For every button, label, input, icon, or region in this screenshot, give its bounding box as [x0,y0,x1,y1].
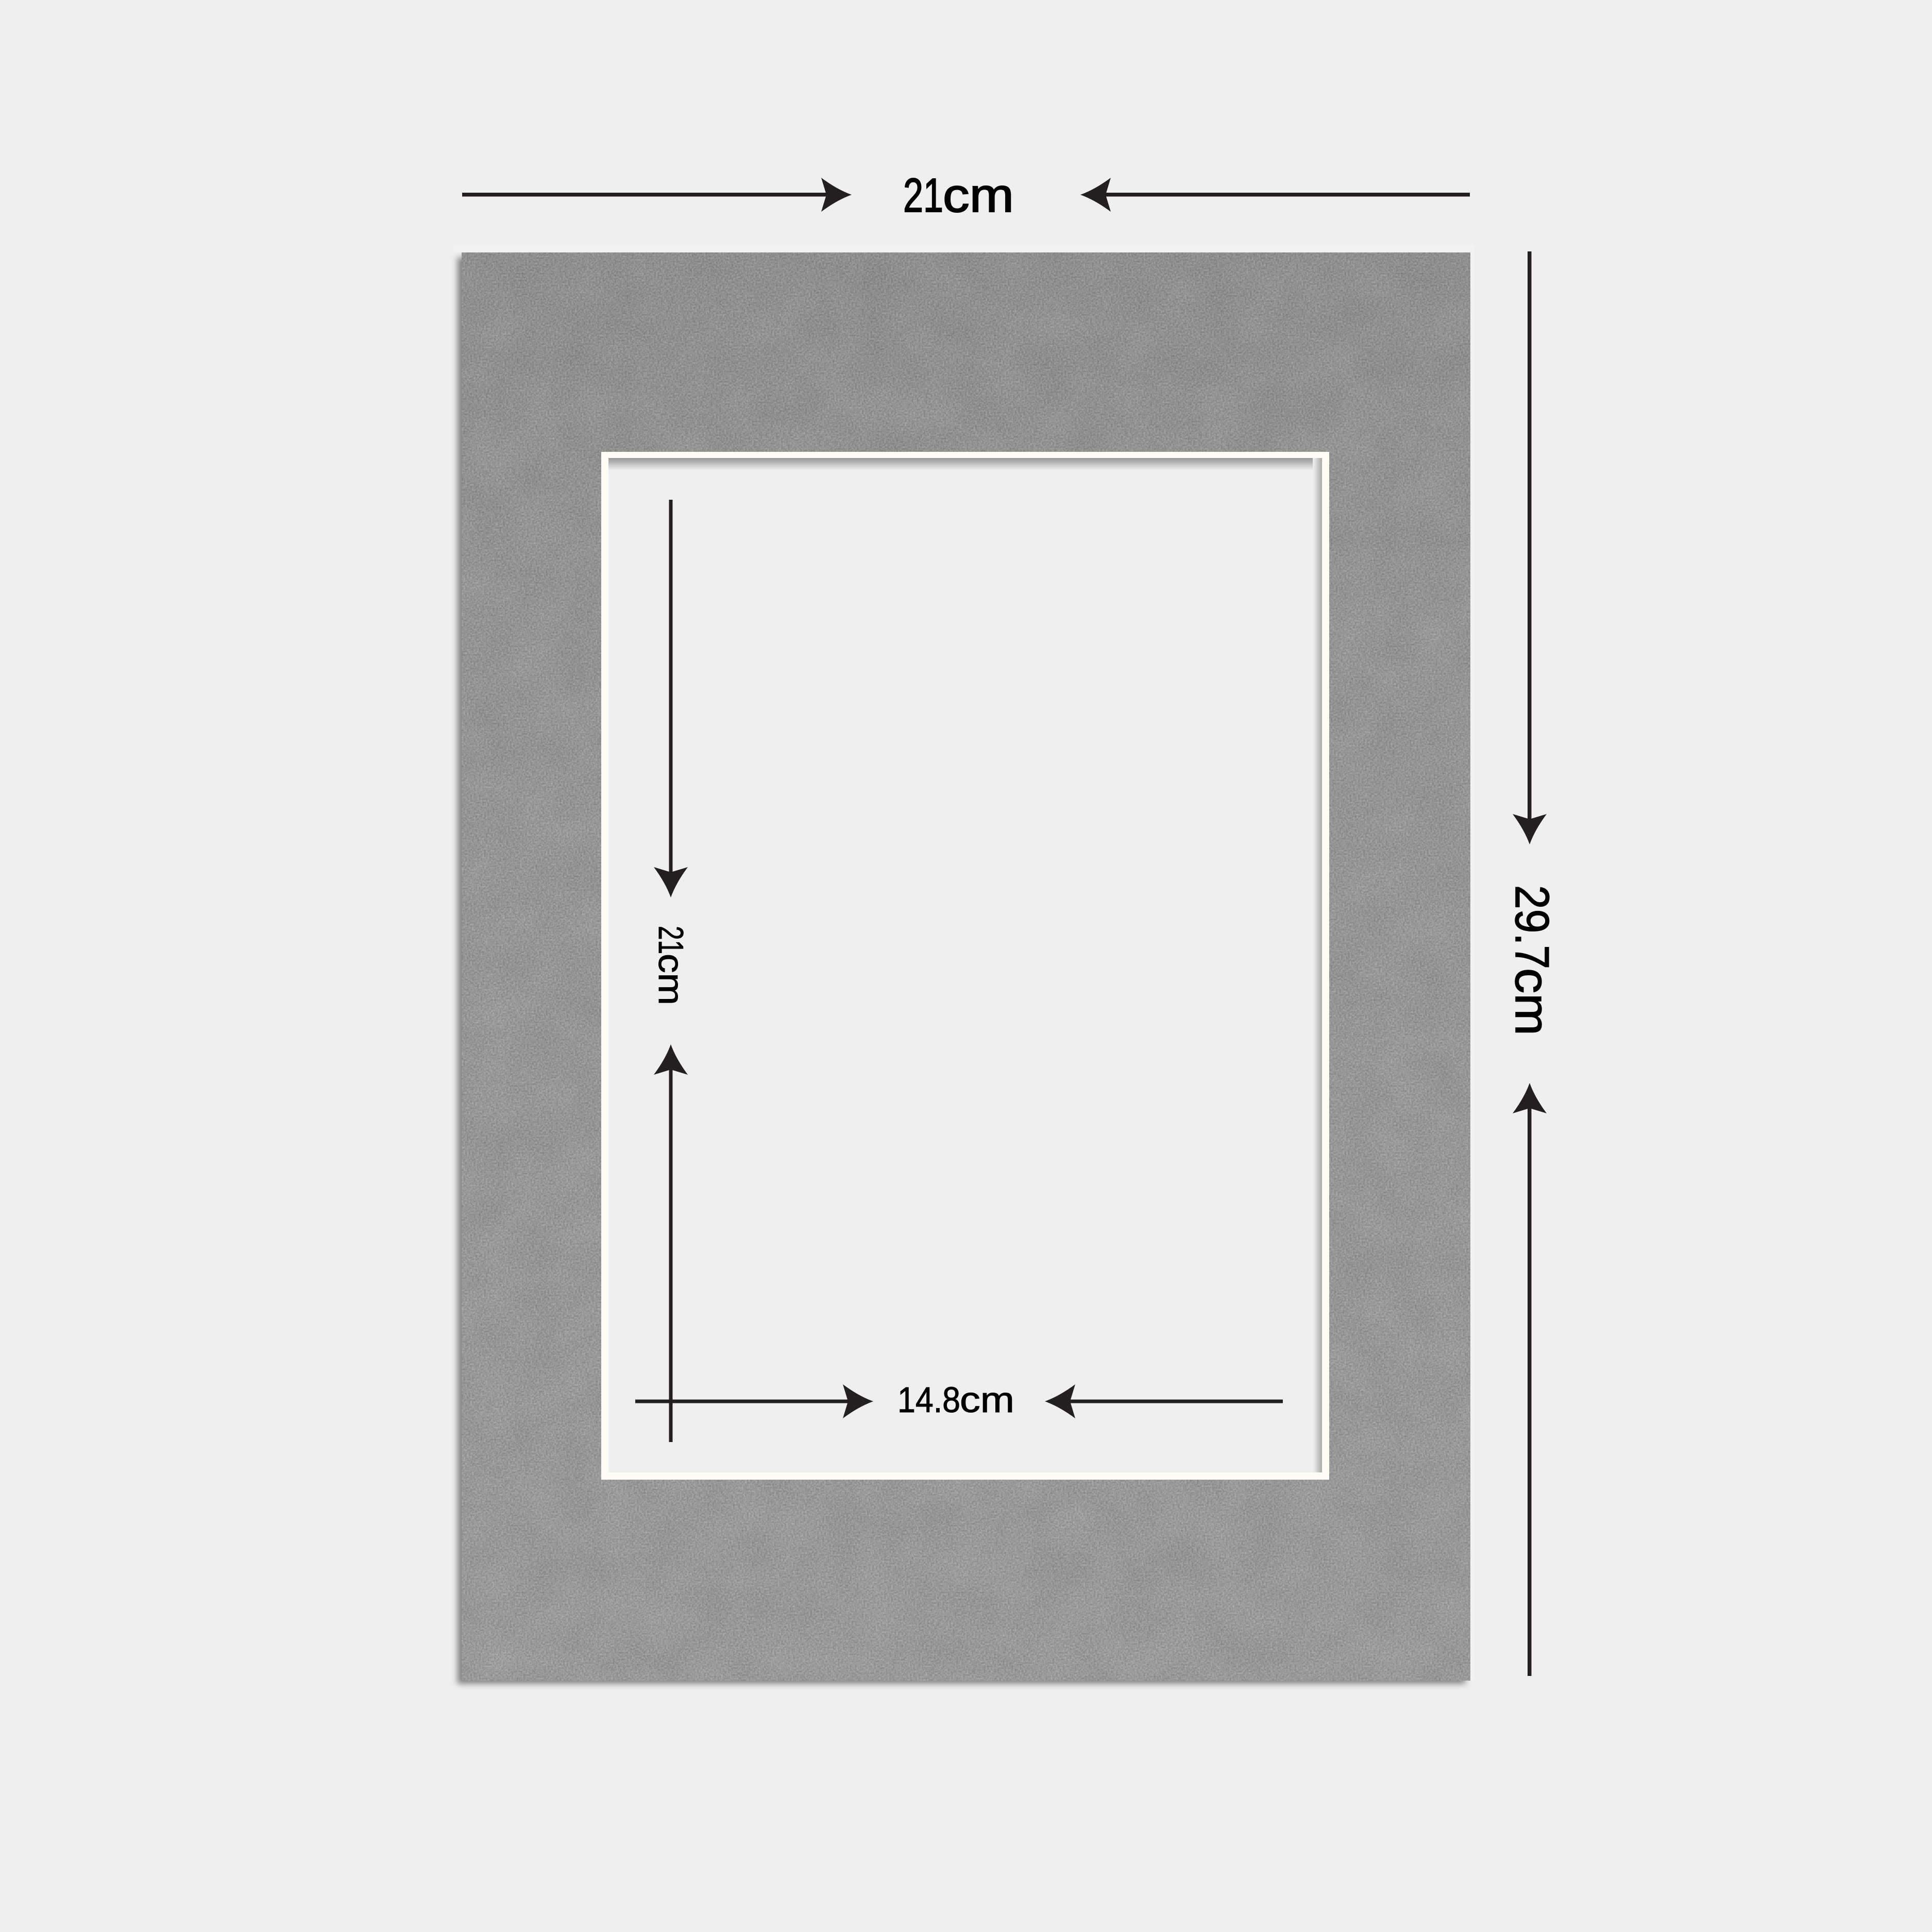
arrow: inner bottom pointing left [1045,1384,1283,1418]
mount light halo [453,244,1475,1681]
inner width dimension: 14.8cm [635,1380,1283,1420]
arrow: top left pointing right [462,178,852,212]
label: 14.8cm inner width: 14.8 [897,1380,960,1420]
label: 21cm outer width: 21 [903,168,943,222]
label: 21cm inner height: cm [651,954,690,1005]
inner height dimension: 21cm [651,500,690,1442]
arrow: right side pointing up [1513,1083,1547,1676]
window interior [608,458,1322,1472]
arrow: inner pointing up [654,1044,688,1442]
panel: grey picture mount [453,244,1475,1684]
panel: cream window opening [601,452,1329,1480]
arrow: inner pointing down [654,500,688,897]
cream bevel [601,452,1329,1480]
label: 14.8cm inner width: cm [960,1380,1014,1420]
label: 21cm inner height: 21 [651,926,690,954]
label: 29.7cm outer height: cm [1505,968,1559,1036]
inner right shadow [1313,458,1322,1472]
mount board [462,252,1470,1681]
arrow: inner bottom pointing right [635,1384,873,1418]
label: 29.7cm outer height: 29.7 [1505,885,1559,969]
right dimension: 29.7cm [1505,251,1559,1676]
arrow: right side pointing down [1513,251,1547,844]
inner top shadow [608,458,1322,470]
top dimension: 21cm [462,168,1470,222]
arrow: top right pointing left [1080,178,1470,212]
label: 21cm outer width: cm [943,168,1014,222]
mount drop shadow [457,258,1465,1684]
